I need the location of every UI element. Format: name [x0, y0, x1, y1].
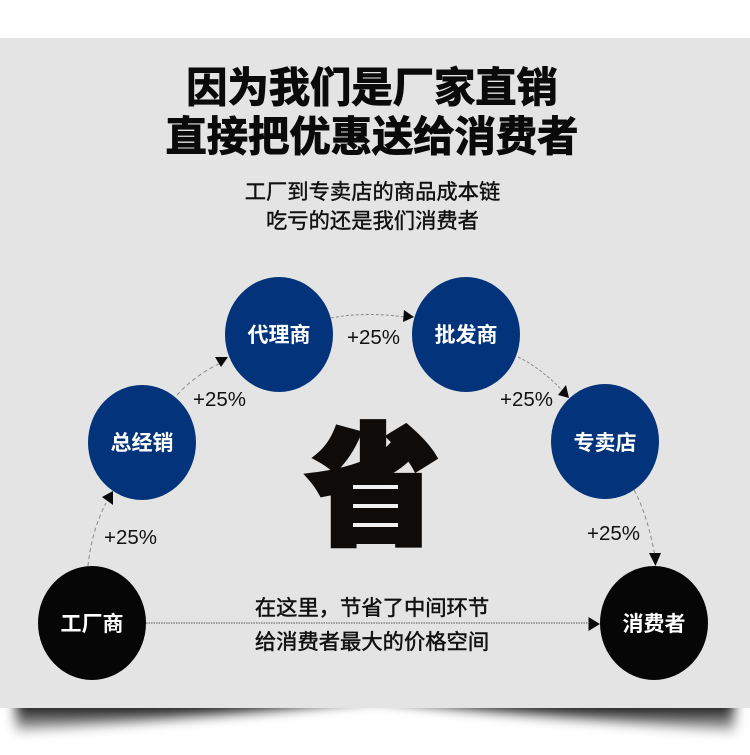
node: consumer: 消费者	[622, 613, 686, 636]
node: consumer	[600, 566, 708, 680]
markup labels: +25%	[500, 388, 553, 411]
arrow: wholesaler to retailer	[518, 357, 569, 398]
bottom shadow	[16, 695, 734, 731]
arrow: retailer to consumer	[634, 490, 661, 566]
node: factory: 工厂商	[60, 613, 124, 636]
arrow: factory to distributor	[88, 491, 113, 566]
subtitle: 工厂到专卖店的商品成本链	[245, 180, 500, 204]
node: general distributor	[88, 385, 196, 500]
markup labels: +25%	[193, 388, 246, 411]
node: agent: 代理商	[248, 324, 310, 347]
savings message: 在这里，节省了中间环节	[255, 596, 489, 620]
node: factory	[38, 566, 146, 680]
arrow: distributor to agent	[177, 357, 228, 395]
node: retailer	[551, 384, 659, 499]
node: wholesaler: 批发商	[434, 324, 498, 347]
arrow: factory to consumer	[146, 617, 600, 631]
large character: save: 省	[310, 417, 437, 559]
arrow: agent to wholesaler	[331, 310, 414, 322]
markup labels	[104, 326, 640, 549]
savings message: 给消费者最大的价格空间	[255, 630, 489, 654]
title	[166, 65, 578, 160]
subtitle	[245, 180, 500, 233]
node: retailer: 专卖店	[574, 432, 636, 455]
node: wholesaler	[412, 277, 520, 392]
node: agent	[225, 277, 333, 392]
title: 直接把优惠送给消费者	[166, 114, 578, 160]
markup labels: +25%	[104, 526, 157, 549]
savings message	[255, 596, 489, 654]
markup labels: +25%	[587, 522, 640, 545]
markup labels: +25%	[347, 326, 400, 349]
node: general distributor: 总经销	[110, 432, 174, 455]
subtitle: 吃亏的还是我们消费者	[266, 209, 479, 233]
title: 因为我们是厂家直销	[186, 65, 558, 111]
